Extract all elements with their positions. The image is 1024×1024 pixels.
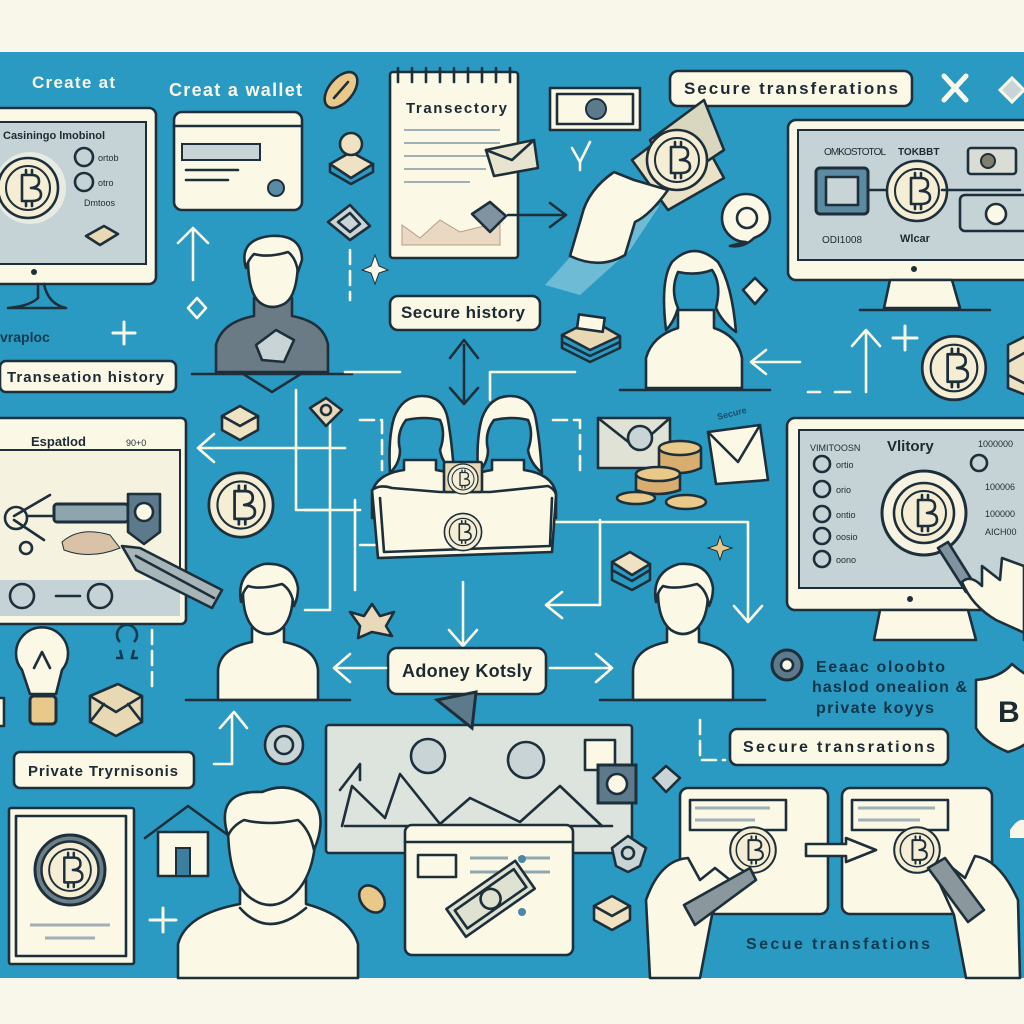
icon: stamp small bottom [354, 880, 390, 918]
icon: small key ring [116, 625, 138, 658]
panel: right monitor: oosio [836, 532, 858, 542]
arrow: left from label [334, 654, 386, 682]
panel: expanded left window: Espatlod [31, 434, 86, 449]
panel: certificate bitcoin [9, 808, 134, 964]
panel: top-right monitor [788, 120, 1024, 310]
label: secure history [390, 296, 540, 330]
line: dashed to box [151, 630, 153, 690]
label: private transactions [14, 752, 194, 788]
icon: folded package [90, 684, 142, 736]
panel: right monitor: ontio [836, 510, 856, 520]
coin: left card [730, 827, 776, 873]
coin: left center [209, 473, 273, 537]
panel: expanded left window [0, 418, 186, 624]
panel: right transfer card [842, 788, 992, 914]
panel: top-right monitor: Wlcar [900, 233, 931, 245]
panel: top-right monitor: TOKBBT [898, 147, 939, 158]
person: top-left with shirt [192, 236, 352, 392]
icon: open envelope [708, 405, 768, 484]
woman: top right [620, 251, 770, 390]
panel: transactory notebook [390, 68, 566, 258]
icon: stack of notes [562, 314, 620, 362]
person: bottom large [178, 788, 358, 978]
label: secure history: Secure history [401, 303, 526, 322]
icon: left edge bar [0, 698, 4, 726]
label: private transactions: Private Tryrnisonis [28, 763, 178, 780]
connector lines top center [296, 250, 762, 622]
icon: shield with bitcoin: B [998, 696, 1020, 729]
panel: top-left monitor: otro [98, 178, 114, 188]
baseline under right person [600, 699, 765, 701]
panel: create a wallet window [174, 112, 302, 210]
arrow: left from center [198, 434, 345, 462]
person: right center [633, 564, 733, 700]
panel: chart center [326, 725, 636, 853]
icon: house [145, 806, 232, 876]
panel: right monitor: ortio [836, 460, 854, 470]
icon: banknote [550, 88, 640, 130]
baseline under left person [186, 699, 350, 701]
panel: top-right monitor: ODI1008 [822, 235, 862, 246]
panel: right monitor: oono [836, 555, 856, 565]
icon: star badge [350, 604, 394, 638]
icon: speech bubble [722, 194, 770, 246]
arrow: up with dashed lead [808, 330, 880, 392]
icon: shield with bitcoin [976, 664, 1024, 752]
panel: right monitor: 100000 [985, 509, 1015, 519]
icon: small diamond [188, 298, 206, 318]
label: secure transactions middle [730, 729, 948, 765]
panel: right monitor: orio [836, 485, 851, 495]
panel: top-left monitor [0, 108, 156, 308]
icon: sparkle right [708, 536, 732, 560]
panel: right monitor: VIMITOOSN [810, 443, 860, 453]
icon: small shield [328, 205, 370, 240]
panel: bottom browser window [405, 825, 573, 955]
icon: envelope and coins [598, 418, 706, 509]
icon: lightbulb [16, 627, 68, 724]
panel: right monitor: 1000000 [978, 439, 1013, 449]
text: ebanc caption: private koyys [816, 700, 934, 717]
person: left center [218, 564, 318, 700]
icon: small diamond right [743, 278, 767, 304]
icon: package right edge [1008, 336, 1024, 395]
icon: stamp on stack [330, 133, 373, 184]
icon: small cloud right [1010, 820, 1024, 838]
icon: sparkle [362, 255, 388, 284]
panel: right monitor: Vlitory [887, 438, 934, 455]
hand: bottom right holding pen [928, 856, 1020, 978]
panel: right monitor: 100006 [985, 482, 1015, 492]
icon: paperclip pin [318, 66, 364, 114]
arrow: double vertical [450, 340, 478, 404]
panel: top-left monitor: Casiningo lmobinol [3, 130, 105, 142]
hand with stylus [938, 542, 1024, 640]
icon: stack small [222, 406, 258, 440]
label: adoney kotsly: Adoney Kotsly [402, 661, 532, 681]
hand with coin and notes [545, 100, 724, 295]
label: secure transactions middle: Secure transrations [743, 739, 935, 756]
icon: stack bottom [594, 896, 630, 930]
hand: bottom left holding pen [646, 858, 756, 978]
heading: Create a wallet: Creat a wallet [169, 80, 302, 100]
arrow: up to wallet [178, 228, 208, 280]
icon: open envelope: Secure [716, 405, 748, 422]
icon: plus right [893, 326, 917, 350]
icon: stack right [612, 552, 650, 590]
icon: diamond small [653, 766, 680, 792]
center wallet with two women [372, 396, 556, 558]
panel: left transfer card [680, 788, 828, 914]
label: secure transformations top [670, 71, 912, 106]
icon: plus bottom left [150, 908, 176, 932]
arrow: left toward woman [751, 350, 800, 374]
icon: pen on left window [122, 546, 222, 608]
label: secure transformations top: Secure transferations [684, 79, 898, 98]
panel: expanded left window: 90+0 [126, 438, 146, 448]
coin: right edge [922, 336, 986, 400]
icon: diamond top right [1000, 78, 1024, 102]
icon: cap badge [310, 398, 342, 426]
icon: gear badge [772, 650, 802, 680]
panel: top-left monitor: ortob [98, 153, 119, 163]
heading: Create at: Create at [32, 73, 115, 92]
panel: top-left monitor: Dmtoos [84, 198, 116, 208]
icon: small sparks [572, 142, 590, 170]
label: transaction history [0, 361, 176, 392]
text: small caption: vraploc [0, 329, 50, 345]
panel: top-right monitor: OMKOSTOTOL [824, 147, 886, 158]
label: adoney kotsly [388, 648, 546, 694]
line: down right connector [700, 720, 725, 760]
panel: right monitor [787, 418, 1024, 640]
arrow: up to person [214, 712, 247, 764]
icon: plus left [113, 322, 135, 344]
arrow: right from label [550, 654, 612, 682]
text: ebanc caption: haslod onealion & [812, 679, 967, 696]
panel: transactory notebook: Transectory [406, 100, 508, 117]
coin: right card [894, 827, 940, 873]
icon: close mark [944, 76, 966, 100]
arrow: down center [449, 582, 477, 646]
label: transaction history: Transeation history [7, 369, 165, 386]
icon: small coin [265, 726, 303, 764]
icon: pennant [437, 692, 476, 728]
panel: right monitor: AICH00 [985, 527, 1017, 537]
text: ebanc caption [812, 659, 967, 717]
text: ebanc caption: Eeaac oloobto [816, 659, 945, 676]
arrow: between cards [806, 838, 876, 862]
caption: secure transfations bottom: Secue transfations [746, 936, 930, 953]
icon: small shield bottom [612, 836, 646, 872]
